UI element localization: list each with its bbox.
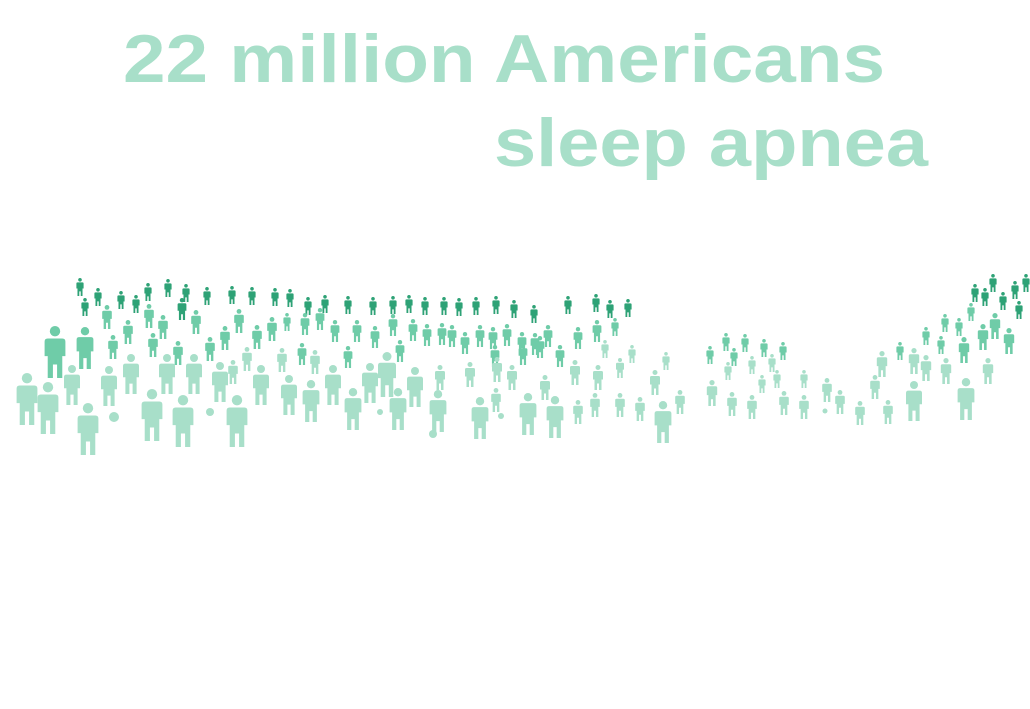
title: 22 million Americans [123, 21, 885, 97]
title [123, 21, 929, 181]
crowd of people icons [17, 274, 1030, 455]
title: sleep apnea [494, 105, 929, 181]
mid row [45, 303, 1014, 378]
light front rows [17, 340, 993, 455]
dark back row [76, 274, 1030, 323]
